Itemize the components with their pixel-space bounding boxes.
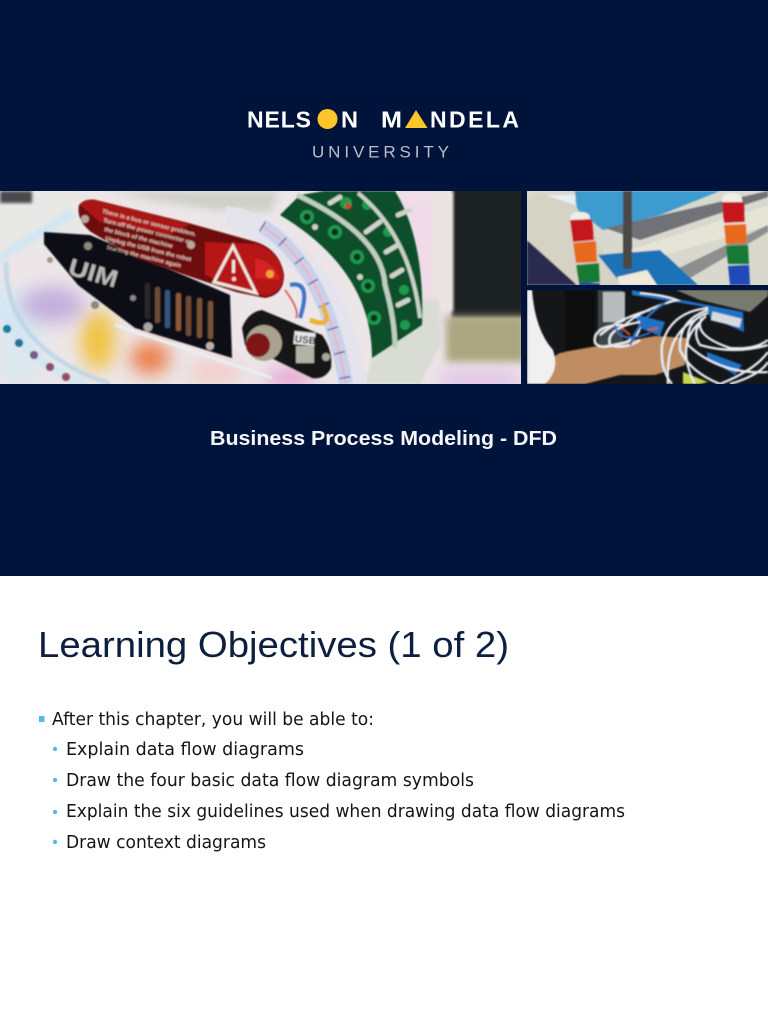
bullet: dot 4: [53, 840, 57, 844]
red warning panel: Unplug the USB from the robot: [105, 236, 192, 263]
white sleeve: [527, 290, 555, 384]
subtitle: Business Process Modeling - DFD: [210, 428, 557, 450]
connector plate with USB: [242, 310, 331, 378]
coloured beads: [3, 325, 70, 381]
photo: stack lights and blue bins: [527, 191, 768, 286]
shelves: [630, 206, 768, 256]
logo: Nelson Mandela University: N: [341, 106, 358, 132]
arm and hand: [540, 336, 688, 384]
green disc assembly: [280, 191, 422, 358]
photo: hand plugging network cables: [527, 290, 768, 384]
lower bin: [598, 250, 698, 285]
logo: Nelson Mandela University: M: [381, 106, 402, 132]
blurred clear parts along the top edge: [110, 191, 280, 212]
logo: Nelson Mandela University: NDELA: [430, 106, 519, 132]
pale tube on the left: [0, 212, 85, 384]
dark corner top-left: [0, 191, 32, 203]
objectives list: Explain the six guidelines used when drawing data flow diagrams: [66, 802, 625, 822]
black support arm with UIM label: UIM: [65, 254, 121, 294]
objectives list: Draw the four basic data flow diagram symbols: [66, 771, 474, 791]
objectives list: [39, 710, 625, 853]
logo: Nelson Mandela University: [247, 106, 519, 162]
warning triangle: [214, 246, 256, 293]
red warning panel: Starting the machine again: [106, 245, 182, 270]
red warning panel: There is a bus or sensor problem.: [102, 209, 197, 238]
pale block: [617, 270, 657, 285]
logo: Nelson Mandela University: NELS: [247, 106, 311, 132]
bullet: square: [39, 716, 44, 722]
logo: yellow circle: [318, 109, 338, 129]
red warning panel: Turn off the power connector on: [103, 218, 193, 246]
bullet: dot 1: [53, 747, 57, 751]
navy title slide background: [0, 0, 768, 576]
clear curved guard with cable wrap: [225, 206, 367, 384]
dark background block: [452, 186, 526, 318]
logo: yellow triangle: [405, 110, 428, 128]
logo: Nelson Mandela University: UNIVERSITY: [312, 142, 449, 162]
beam: [527, 193, 625, 285]
black support arm with UIM label: [44, 232, 232, 358]
objectives list: After this chapter, you will be able to:: [52, 710, 374, 730]
objectives list: Draw context diagrams: [66, 833, 266, 853]
clear base at lower right of machine: [365, 298, 441, 384]
left stack light: [570, 212, 591, 222]
photo: robot machine with red warning panel: [0, 186, 526, 388]
connector plate with USB: USB: [294, 334, 316, 347]
bullet: dot 2: [53, 778, 57, 782]
right stack light: [722, 193, 743, 203]
bullet: dot 3: [53, 810, 57, 814]
objectives list: Explain data flow diagrams: [66, 740, 304, 760]
heading: Learning Objectives: Learning Objectives (1 of 2): [38, 624, 509, 665]
white cables: [595, 293, 768, 384]
bins at back: [575, 191, 720, 230]
network switch: [676, 290, 768, 312]
glass plate edge below arm: [115, 325, 272, 378]
red warning panel: [78, 200, 284, 298]
red warning panel: the block of the machine: [104, 227, 174, 250]
pole: [623, 191, 632, 269]
